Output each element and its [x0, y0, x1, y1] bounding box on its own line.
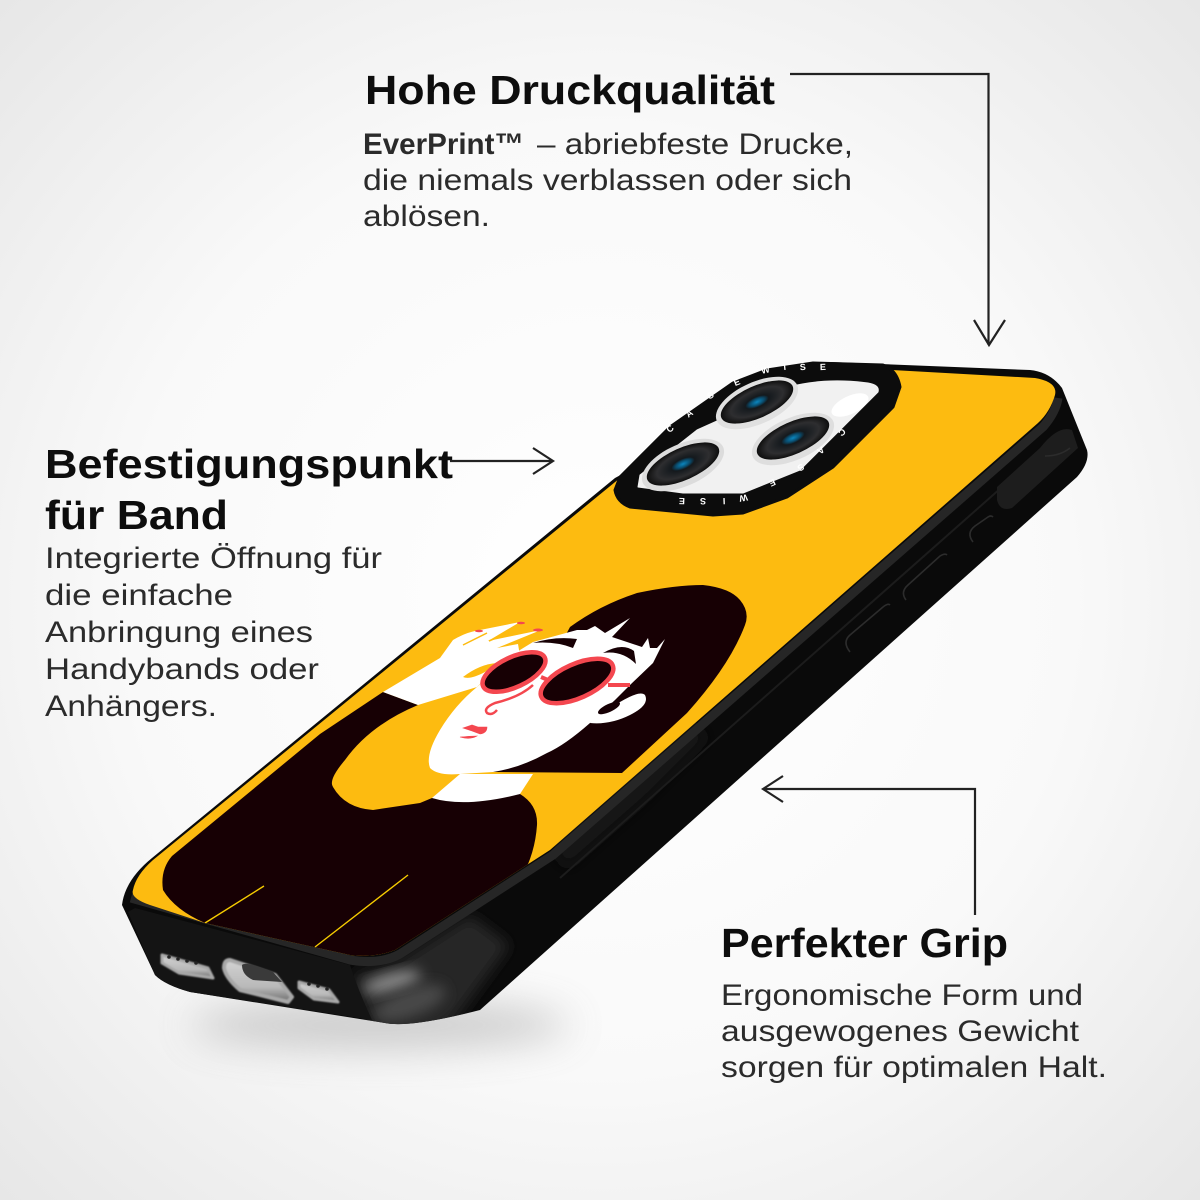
casewise lettering: W: [760, 364, 771, 376]
casewise lettering: S: [795, 462, 806, 473]
casewise lettering: E: [767, 477, 777, 489]
nails: [475, 622, 543, 632]
arrow: strap attachment: [450, 448, 553, 474]
rim highlight along lower edge: [131, 398, 1058, 962]
casewise lettering: E: [732, 376, 742, 388]
heading: Befestigungspunkt: [45, 441, 453, 538]
text block: Integrierte Öffnung: [45, 542, 382, 723]
lens top: [708, 366, 806, 440]
casewise lettering: A: [684, 407, 695, 420]
text block: Ergonomische Form: sorgen für optimalen Halt.: [721, 1051, 1107, 1084]
text block: Ergonomische Form: [721, 979, 1107, 1084]
earring: [598, 702, 620, 714]
heading: Hohe Druckqualität: Hohe Druckqualität: [365, 67, 775, 113]
yellow back panel: [133, 370, 1055, 956]
text block: EverPrint: [363, 128, 853, 233]
text block: Integrierte Öffnung: Anhängers.: [45, 690, 217, 723]
casewise lettering: W: [738, 492, 749, 504]
nose: [486, 685, 533, 714]
ear: [590, 694, 646, 723]
text block: EverPrint: ablösen.: [363, 200, 490, 233]
lens right: [744, 402, 842, 476]
bottom corner gloss: [352, 730, 700, 1040]
eyebrows: [533, 638, 636, 664]
casewise lettering: E: [679, 496, 685, 506]
casewise lettering: S: [799, 362, 806, 372]
yellow gap by glasses: [463, 663, 497, 678]
charging port opening: [242, 964, 282, 982]
speaker left holes: [167, 955, 198, 965]
heading: Perfekter Grip: Perfekter Grip: [721, 920, 1008, 966]
yellow gaps by fingers: [462, 632, 494, 646]
text block: EverPrint: EverPrint™: [363, 128, 524, 161]
text block: Ergonomische Form: ausgewogenes Gewicht: [721, 1015, 1080, 1048]
island window: [638, 381, 878, 493]
bottom face: [128, 908, 372, 1020]
heading: Befestigungspunkt: für Band: [45, 492, 228, 538]
casewise lettering: C: [664, 422, 676, 435]
casewise lettering: [664, 362, 848, 506]
text block: Integrierte Öffnung: Anbringung eines: [45, 616, 313, 649]
casewise lettering: E: [820, 362, 826, 372]
speaker left: [162, 955, 213, 978]
arrow: grip: [763, 776, 975, 915]
lips: [460, 725, 487, 738]
casewise lettering: S: [700, 496, 706, 506]
text block: Integrierte Öffnung: die einfache: [45, 579, 233, 612]
speaker right holes: [307, 982, 329, 991]
casewise lettering: S: [705, 390, 716, 401]
text block: Integrierte Öffnung: Integrierte Öffnung für: [45, 542, 382, 575]
casewise lettering: I: [723, 496, 726, 506]
illustration: [162, 585, 747, 965]
phone case: [122, 362, 1088, 1040]
yellow sweater lines: [205, 875, 408, 947]
arrow: print quality: [790, 74, 1005, 345]
speaker right: [299, 982, 338, 1002]
island frame: [615, 363, 900, 515]
side buttons: [846, 448, 1070, 652]
text block: EverPrint: – abriebfeste Drucke,: [537, 128, 853, 161]
face: [429, 618, 665, 774]
text block: Integrierte Öffnung: Handybands oder: [45, 653, 319, 686]
text block: EverPrint: die niemals verblassen oder sich: [363, 164, 852, 197]
charging port: [224, 960, 292, 1002]
grip block: [997, 429, 1078, 509]
heading: Befestigungspunkt: Befestigungspunkt: [45, 441, 453, 487]
drop shadow under phone: [190, 1001, 570, 1049]
camera island: [615, 362, 900, 515]
lens left: [634, 428, 732, 502]
black sweater: [162, 692, 537, 965]
sunglasses: [480, 650, 630, 706]
neck: [432, 774, 533, 802]
flash: [828, 388, 872, 422]
hand and arm: [383, 622, 541, 705]
text block: Ergonomische Form: Ergonomische Form und: [721, 979, 1083, 1012]
casewise lettering: I: [783, 362, 786, 372]
case body: [122, 362, 1088, 1024]
hair: [493, 585, 747, 773]
casewise lettering: A: [815, 444, 826, 457]
side seam line: [560, 480, 1010, 878]
casewise lettering: C: [836, 426, 848, 439]
